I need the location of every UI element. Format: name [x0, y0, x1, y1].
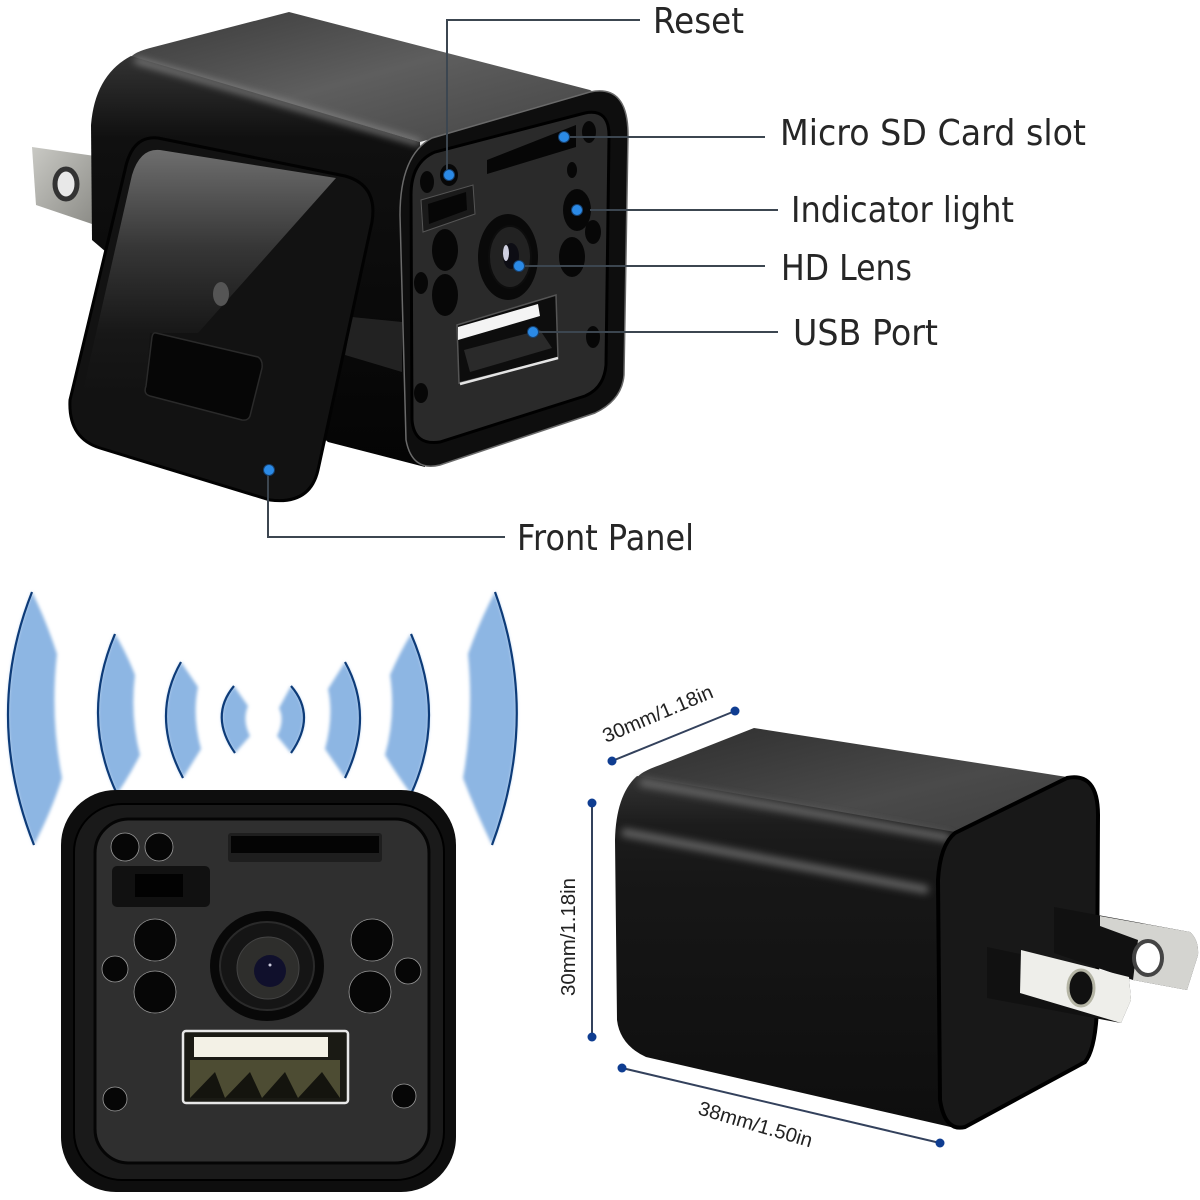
wireless signal waves [8, 592, 517, 845]
label: micro sd: Micro SD Card slot [780, 113, 1086, 154]
dimension left: 30mm/1.18in [558, 878, 580, 996]
face plate [95, 819, 429, 1163]
callout leader: lens [519, 265, 765, 267]
label: indicator light: Indicator light [791, 190, 1014, 231]
cube top face [131, 12, 597, 142]
charger with dimensions [558, 681, 1198, 1152]
lower body shadow patch [345, 317, 402, 372]
lens [210, 911, 324, 1021]
label: reset: Reset [653, 1, 744, 42]
usb port [183, 1031, 348, 1103]
device: exploded camera charger with labels [32, 1, 1086, 559]
panel lens spot [213, 282, 229, 306]
callout dots [264, 132, 582, 476]
waves right [277, 592, 517, 845]
lens [478, 214, 538, 300]
lower prong tip [1020, 950, 1131, 1023]
front panel [70, 138, 373, 501]
usb port [457, 295, 558, 384]
button [428, 192, 467, 224]
dimension bottom [618, 1064, 944, 1152]
dimension top: 30mm/1.18in [599, 681, 717, 748]
side face [615, 776, 955, 1128]
lower prong hole [1068, 970, 1094, 1006]
panel slot [145, 333, 262, 420]
plug face [938, 777, 1098, 1128]
top face [637, 728, 1075, 836]
callout leader: indicator [590, 209, 778, 211]
callout leader: reset [447, 20, 640, 172]
upper prong tip [1100, 916, 1198, 990]
label: front panel: Front Panel [517, 518, 694, 559]
holes [102, 833, 421, 1111]
label: usb port: USB Port [793, 313, 938, 354]
label: hd lens: HD Lens [781, 248, 912, 289]
dimension bottom: 38mm/1.50in [696, 1098, 815, 1152]
port face [400, 91, 628, 466]
waves left [8, 592, 250, 845]
plug prong [32, 147, 95, 225]
outer shell [61, 790, 456, 1192]
inner ring [74, 804, 444, 1180]
front view of ports [61, 790, 456, 1192]
upper prong hole [1134, 941, 1162, 975]
cube side body [91, 56, 425, 467]
lower prong [987, 947, 1131, 1023]
callout leader: usb [533, 331, 778, 333]
dimension left [558, 798, 596, 1042]
body highlight [135, 60, 420, 143]
sd card slot [487, 125, 576, 174]
side highlights [622, 782, 950, 890]
callout leader: front panel [268, 470, 505, 537]
button recess [421, 185, 475, 232]
holes [414, 121, 601, 403]
sd slot [228, 833, 382, 862]
upper prong [1054, 907, 1198, 990]
callout leader: sd slot [566, 136, 765, 138]
dimension top [599, 681, 740, 766]
button recess [112, 866, 210, 907]
